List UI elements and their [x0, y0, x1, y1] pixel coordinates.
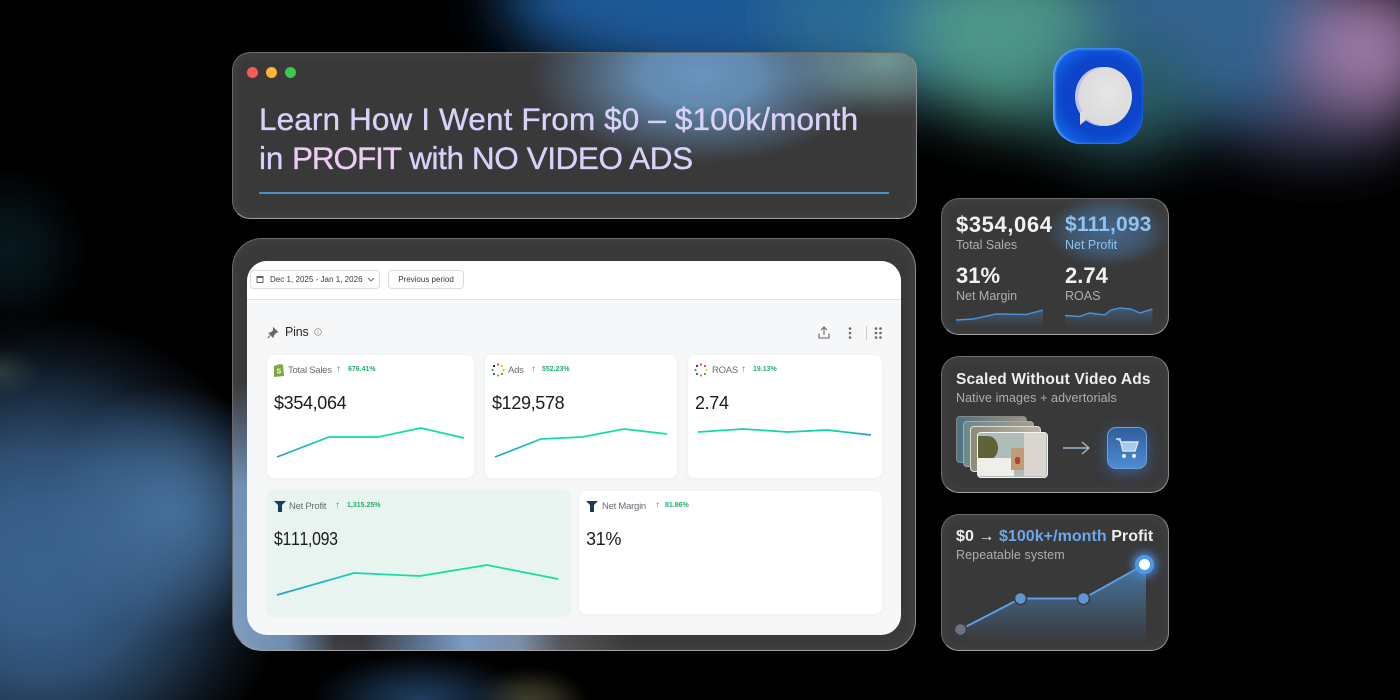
sparkline — [698, 428, 872, 436]
panel: key metrics: Total Sales — [956, 238, 1017, 252]
card: net margin: 31% — [586, 529, 621, 549]
funnel logo — [274, 501, 286, 512]
card: total sales: ↑ — [336, 364, 341, 375]
image stack — [956, 416, 1048, 478]
date range button — [250, 270, 380, 289]
sparkline — [276, 564, 558, 596]
panel: key metrics: 2.74 — [1065, 263, 1108, 288]
card: net margin: 81.86% — [665, 502, 689, 509]
panel: profit growth: Repeatable system — [956, 548, 1065, 562]
card: net margin: Net Margin — [602, 501, 646, 512]
card: ads: $129,578 — [492, 393, 564, 413]
panel: key metrics: $354,064 — [956, 212, 1053, 237]
card: net profit: 1,315.25% — [347, 502, 380, 509]
card: roas: ROAS — [712, 365, 738, 376]
panel: scaled without video ads — [941, 356, 1169, 493]
pins heading: Pins — [285, 325, 309, 339]
toolbar icons — [818, 326, 882, 340]
window controls — [247, 67, 296, 78]
title underline — [259, 192, 889, 194]
card: net profit: Net Profit — [289, 501, 326, 512]
mini sparklines — [956, 307, 1153, 324]
photo — [977, 432, 1048, 478]
card: roas: 2.74 — [695, 393, 729, 413]
card: net profit: ↑ — [335, 500, 340, 511]
card: total sales: 676.41% — [348, 366, 376, 373]
panel: key metrics: $111,093 — [1065, 213, 1151, 236]
card: net profit: $111,093 — [274, 529, 338, 549]
card: roas: ↑ — [741, 364, 746, 375]
panel: scaled without video ads: Native images + advertorials — [956, 391, 1117, 405]
panel: profit growth: $0 → $100k+/month Profit — [956, 528, 1153, 545]
panel: key metrics — [941, 198, 1169, 335]
panel: profit growth — [941, 514, 1169, 651]
card: roas — [688, 355, 882, 478]
card: net margin: ↑ — [655, 500, 660, 511]
title text: Learn How I Went From $0 – $100k/month — [259, 101, 858, 137]
dashboard screen — [247, 261, 901, 635]
card: total sales: Total Sales — [288, 365, 332, 376]
sparkline — [494, 428, 668, 458]
multicolor dots icon — [491, 363, 505, 377]
shopify icon — [274, 364, 284, 377]
card: roas: 19.13% — [753, 366, 777, 373]
panel: key metrics: 31% — [956, 263, 1000, 288]
card: net profit — [267, 490, 570, 615]
date range button: Dec 1, 2025 - Jan 1, 2026 — [270, 275, 363, 284]
card: total sales — [267, 355, 474, 478]
panel: scaled without video ads: Scaled Without Video Ads — [956, 371, 1151, 388]
pins heading — [268, 325, 322, 339]
panel: dashboard frame — [232, 238, 916, 651]
previous period button: Previous period — [398, 275, 454, 284]
sparkline — [276, 427, 464, 458]
funnel logo — [586, 501, 598, 512]
panel: key metrics: Net Profit — [1065, 238, 1117, 252]
arrow — [1063, 442, 1090, 454]
background upper blobs — [463, 0, 1400, 192]
card: total sales: $354,064 — [274, 393, 346, 413]
toolbar — [247, 261, 901, 300]
card: ads: Ads — [508, 365, 524, 376]
card: net margin — [579, 491, 882, 614]
panel: key metrics: Net Margin — [956, 289, 1017, 303]
title text: in PROFIT with NO VIDEO ADS — [259, 140, 693, 176]
panel: key metrics: ROAS — [1065, 289, 1100, 303]
card: ads: ↑ — [531, 364, 536, 375]
icon: chat app — [1053, 48, 1143, 144]
card: ads — [485, 355, 677, 478]
multicolor dots icon — [694, 363, 708, 377]
panel: title window — [232, 52, 917, 219]
previous period button — [388, 270, 464, 289]
growth line chart — [955, 546, 1162, 637]
title text — [259, 101, 858, 176]
card: ads: 552.23% — [542, 366, 570, 373]
shopify icon: S — [276, 368, 282, 376]
icon: shopping cart — [1107, 427, 1147, 469]
